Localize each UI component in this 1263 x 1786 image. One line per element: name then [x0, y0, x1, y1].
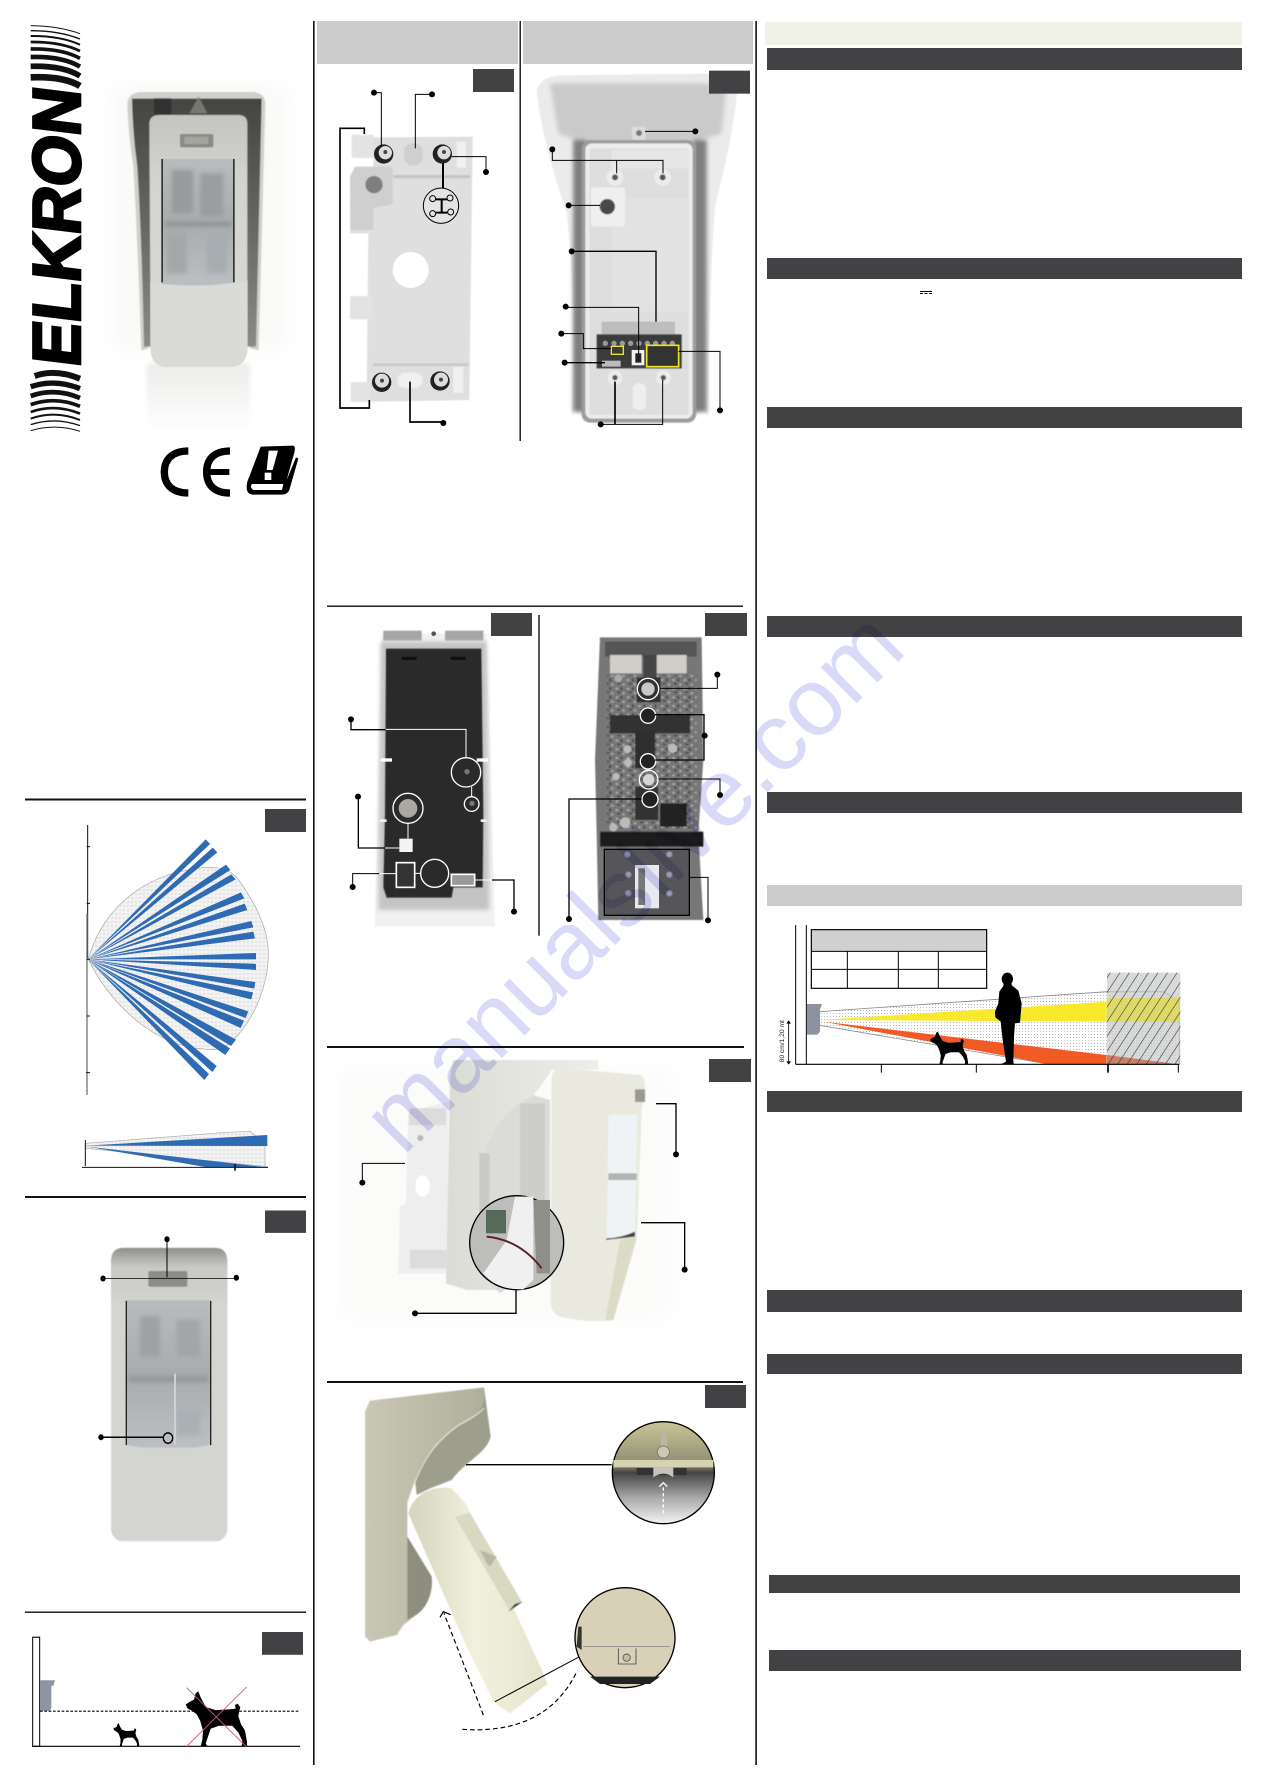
inset: top screw: [612, 1422, 714, 1524]
figure tag: [262, 1632, 303, 1655]
figure A: mounting bracket: [340, 69, 514, 426]
small dog: [113, 1723, 139, 1746]
screws: [372, 144, 452, 392]
housing: [375, 631, 495, 927]
person silhouette: [995, 973, 1022, 1064]
figure tag: [265, 1210, 306, 1233]
dog silhouette: [930, 1032, 968, 1064]
figure D: circuit board: [538, 613, 747, 936]
hood shape: [537, 73, 737, 422]
sensor: [807, 1004, 822, 1035]
exclusion zone: [1107, 973, 1180, 1064]
hood: [365, 1387, 491, 1642]
column headers: grey bands: [317, 21, 753, 64]
cable inset: [470, 1196, 564, 1290]
hole: [393, 252, 429, 288]
red cross: [187, 1687, 247, 1746]
icon: direct current symbol: [920, 291, 932, 294]
top view: beams: [88, 839, 256, 1080]
figure tag: [705, 1385, 746, 1408]
sensor body: [111, 1248, 227, 1541]
upper beam: [819, 1002, 1107, 1022]
sensors: [637, 678, 659, 807]
bracket plate: [350, 135, 473, 402]
figure: side detection diagram: [779, 925, 1180, 1073]
figure tag: [705, 613, 747, 636]
figure H: exploded view: [340, 1059, 751, 1321]
callouts: [362, 1104, 685, 1313]
watermark: manualslive.com: [342, 591, 923, 1172]
callouts: [351, 719, 514, 912]
figure B: hood interior: [537, 71, 750, 427]
photo: sensor front with hood: [113, 83, 287, 433]
lower beam: [823, 1022, 1107, 1064]
callouts: [101, 1239, 236, 1443]
figure G: pet immunity height: [32, 1632, 303, 1746]
figure tag: [491, 613, 532, 636]
board: [595, 637, 703, 920]
figure E: coverage diagram: [82, 809, 306, 1171]
figure tag: [473, 69, 514, 92]
terminal board: [597, 334, 682, 368]
callouts: [569, 675, 720, 920]
detection lobe: [819, 992, 1179, 1064]
top view: lobe: [88, 867, 268, 1050]
highlighted parts: [379, 729, 492, 887]
hood: [446, 1060, 598, 1293]
section rules: left and middle columns: [25, 606, 744, 1613]
figure tag: [709, 71, 750, 94]
figure C: rear of sensor: [348, 613, 532, 927]
callouts: [340, 93, 486, 422]
leader lines and dashed arrows: [440, 1465, 612, 1730]
sensor body: [408, 1488, 547, 1713]
icons: CE mark and manual: [164, 446, 298, 495]
column dividers: [313, 21, 757, 1765]
figure F: sensor front callouts: [98, 1210, 306, 1541]
height marker: [779, 1020, 791, 1065]
back plate: [398, 1102, 448, 1273]
side view: [82, 1131, 268, 1171]
table: [811, 930, 987, 988]
large dog: [186, 1691, 247, 1746]
label sticker: [635, 865, 659, 908]
right column: section bands: [765, 22, 1242, 1671]
walls, floor and ticks: [796, 925, 1179, 1073]
inset: bottom screw: [575, 1588, 675, 1688]
logo: ELKRON: ELKRON: [20, 83, 95, 370]
sensor: [551, 1068, 645, 1321]
top view: axis: [86, 825, 90, 1095]
sensor side: [40, 1680, 55, 1711]
callouts: [552, 131, 720, 424]
figure tag: [709, 1059, 751, 1082]
figure I: closing the sensor: [365, 1385, 746, 1730]
figure tag: [265, 809, 306, 832]
height marker: 80 cm/1,20 mt: [779, 1020, 786, 1062]
